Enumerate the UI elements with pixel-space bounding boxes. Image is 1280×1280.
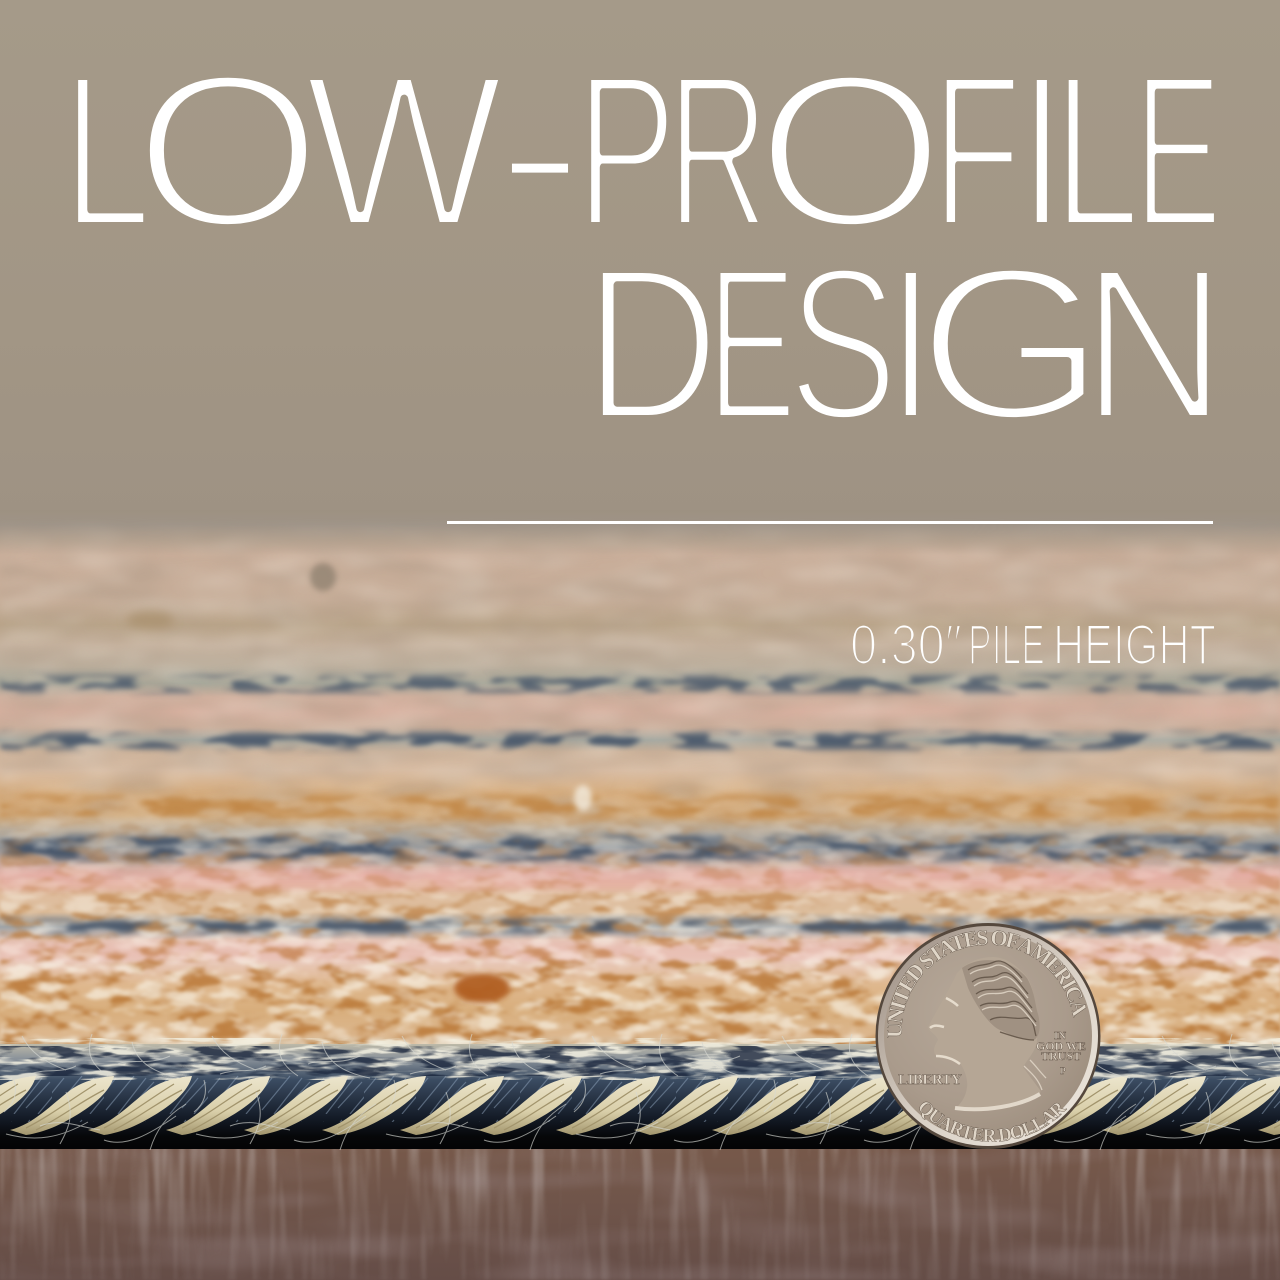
title: LOW-PROFILE DESIGN <box>62 30 1227 466</box>
rug surface with blurred woven stripes <box>0 510 1280 1060</box>
title line 1: R <box>667 30 769 273</box>
title line 2: D <box>584 223 720 466</box>
title line 1: P <box>576 30 677 273</box>
wood floor <box>0 1146 1280 1280</box>
coin lettering: GOD WE <box>1036 1039 1086 1053</box>
title line 1: L <box>62 30 152 273</box>
title line 2: N <box>1081 223 1227 466</box>
title line 2: E <box>707 223 796 466</box>
divider rule <box>447 521 1213 524</box>
title line 1: O <box>756 30 945 273</box>
title line 1: F <box>932 30 1022 273</box>
coin lettering: LIBERTY <box>898 1072 962 1088</box>
coin lettering: TRUST <box>1041 1049 1081 1063</box>
title line 2: G <box>917 223 1106 466</box>
coin lettering: QUARTER DOLLAR <box>919 1102 1067 1142</box>
title line 1: E <box>1134 30 1222 273</box>
title line 2: I <box>886 223 936 466</box>
pile height label: PILE <box>968 613 1045 677</box>
title line 2: S <box>788 223 898 466</box>
icon: quarter coin <box>876 923 1100 1149</box>
coin lettering: IN <box>1054 1030 1066 1042</box>
coin lettering: UNITED STATES OF AMERICA <box>887 930 1086 1038</box>
coin lettering <box>887 930 1086 1142</box>
title line 1: - <box>495 30 585 273</box>
title line 1: L <box>1053 30 1140 273</box>
title line 1: O <box>134 30 322 273</box>
rug braided edge <box>0 1030 1280 1154</box>
coin portrait <box>928 957 1046 1109</box>
pile height label: 0.30″ <box>850 613 962 677</box>
pile height label: HEIGHT <box>1053 613 1216 677</box>
title line 1: I <box>1017 30 1067 273</box>
title line 1: W <box>304 30 504 273</box>
coin lettering: P <box>1060 1066 1066 1076</box>
backdrop: taupe wall <box>0 0 1280 530</box>
